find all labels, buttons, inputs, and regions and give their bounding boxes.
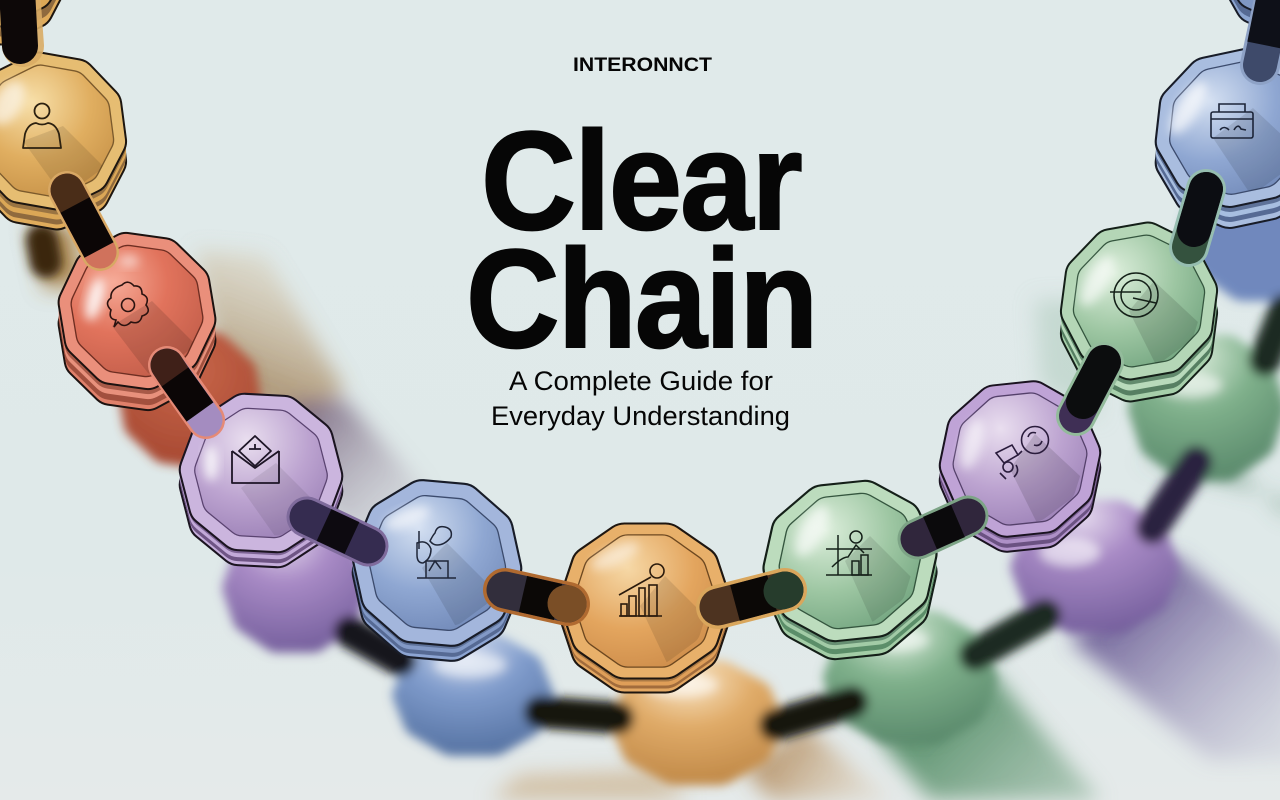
- icon: cycle and chat: [996, 426, 1048, 479]
- connector: green to blue: [1189, 189, 1206, 247]
- icon: rising bar chart: [619, 564, 664, 616]
- long soft shadows: [30, 225, 1280, 800]
- connector: green to purple: [918, 516, 968, 539]
- connector: blue to orange: [505, 590, 568, 604]
- title line: Clear: Clear: [481, 102, 801, 259]
- connector: orange to green: [718, 590, 785, 607]
- connector: blue to top right: [1260, 0, 1275, 65]
- link: amber with person icon: [0, 52, 128, 230]
- icon: gear flower: [108, 282, 148, 327]
- link: green with growth chart icon: [762, 480, 938, 660]
- subtitle line two: Everyday Understanding: [491, 401, 790, 431]
- connector: amber to red: [67, 190, 100, 252]
- icon: envelope: [232, 436, 279, 483]
- link: blue with briefcase icon: [1154, 48, 1280, 229]
- subtitle line one: A Complete Guide for: [509, 366, 773, 396]
- blurred back links: [42, 149, 1280, 785]
- subtitle: [491, 366, 790, 431]
- heading: title: [466, 102, 816, 377]
- link: partial amber top left: [0, 0, 83, 55]
- connector: top left to amber: [17, 0, 23, 46]
- icon: person: [23, 104, 61, 148]
- connector: red to purple: [167, 365, 206, 420]
- connector: purple to blue: [307, 517, 368, 546]
- icon: target: [1110, 273, 1158, 317]
- link: orange with bar chart icon: [561, 522, 728, 694]
- title line: Chain: Chain: [466, 220, 816, 377]
- icon: briefcase: [1211, 104, 1253, 138]
- blurred connector stems: [350, 632, 400, 660]
- link: green with target icon: [1060, 222, 1218, 402]
- connector: purple to green: [1076, 362, 1104, 416]
- link: blue with plant icon: [352, 479, 522, 662]
- blurred highlights on back links: [434, 653, 506, 677]
- icon: growth chart: [826, 531, 872, 575]
- link: purple with envelope icon: [176, 391, 351, 573]
- blurred background chain and shadows: [30, 149, 1280, 800]
- icon: plant: [417, 527, 456, 578]
- link: red with gear icon: [58, 232, 216, 412]
- connectors between links: [17, 0, 1275, 607]
- heading: brand label: INTERONNCT: [573, 55, 712, 76]
- link: partial blue top right: [1202, 0, 1280, 51]
- link: purple with cycle icon: [938, 380, 1102, 553]
